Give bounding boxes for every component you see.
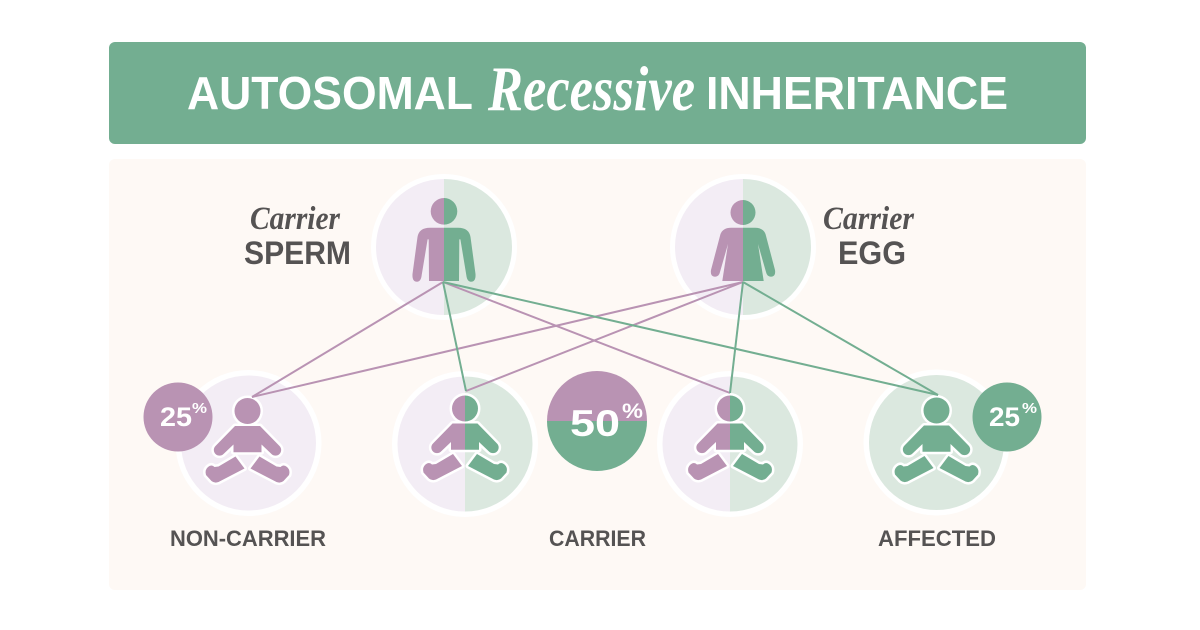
- parent: carrier egg: [670, 174, 816, 320]
- child: non-carrier: [176, 370, 322, 516]
- label: carrier egg: EGG: [838, 235, 906, 271]
- badge: 25 percent non-carrier: %: [192, 400, 207, 417]
- parent: carrier sperm: [371, 174, 517, 320]
- child: carrier left: [392, 371, 538, 517]
- panel: inheritance diagram: [109, 159, 1086, 590]
- title text: recessive: Recessive: [487, 53, 695, 124]
- title text: inheritance: INHERITANCE: [706, 67, 1008, 119]
- label: carrier: CARRIER: [549, 526, 646, 551]
- child: affected: [864, 370, 1010, 516]
- badge: 25 percent affected: [972, 382, 1042, 452]
- badge: 50 percent carrier: [547, 371, 647, 471]
- title text: autosomal: AUTOSOMAL: [187, 67, 473, 119]
- label: carrier sperm: [244, 201, 351, 271]
- badge: 25 percent affected: %: [1022, 400, 1037, 417]
- child: carrier right: [657, 371, 803, 517]
- badge: 25 percent non-carrier: [144, 382, 212, 452]
- label: carrier sperm: Carrier: [250, 201, 341, 237]
- badge: 50 percent carrier: 50: [570, 403, 620, 444]
- badge: 25 percent non-carrier: 25: [160, 402, 192, 432]
- label: carrier sperm: SPERM: [244, 235, 351, 271]
- label: carrier egg: [823, 201, 915, 271]
- title banner: [109, 42, 1086, 144]
- badge: 25 percent affected: 25: [989, 402, 1020, 432]
- label: carrier egg: Carrier: [823, 201, 915, 237]
- inheritance lines: [252, 282, 938, 397]
- label: affected: AFFECTED: [878, 526, 996, 551]
- label: non-carrier: NON-CARRIER: [170, 526, 326, 551]
- badge: 50 percent carrier: %: [622, 400, 643, 423]
